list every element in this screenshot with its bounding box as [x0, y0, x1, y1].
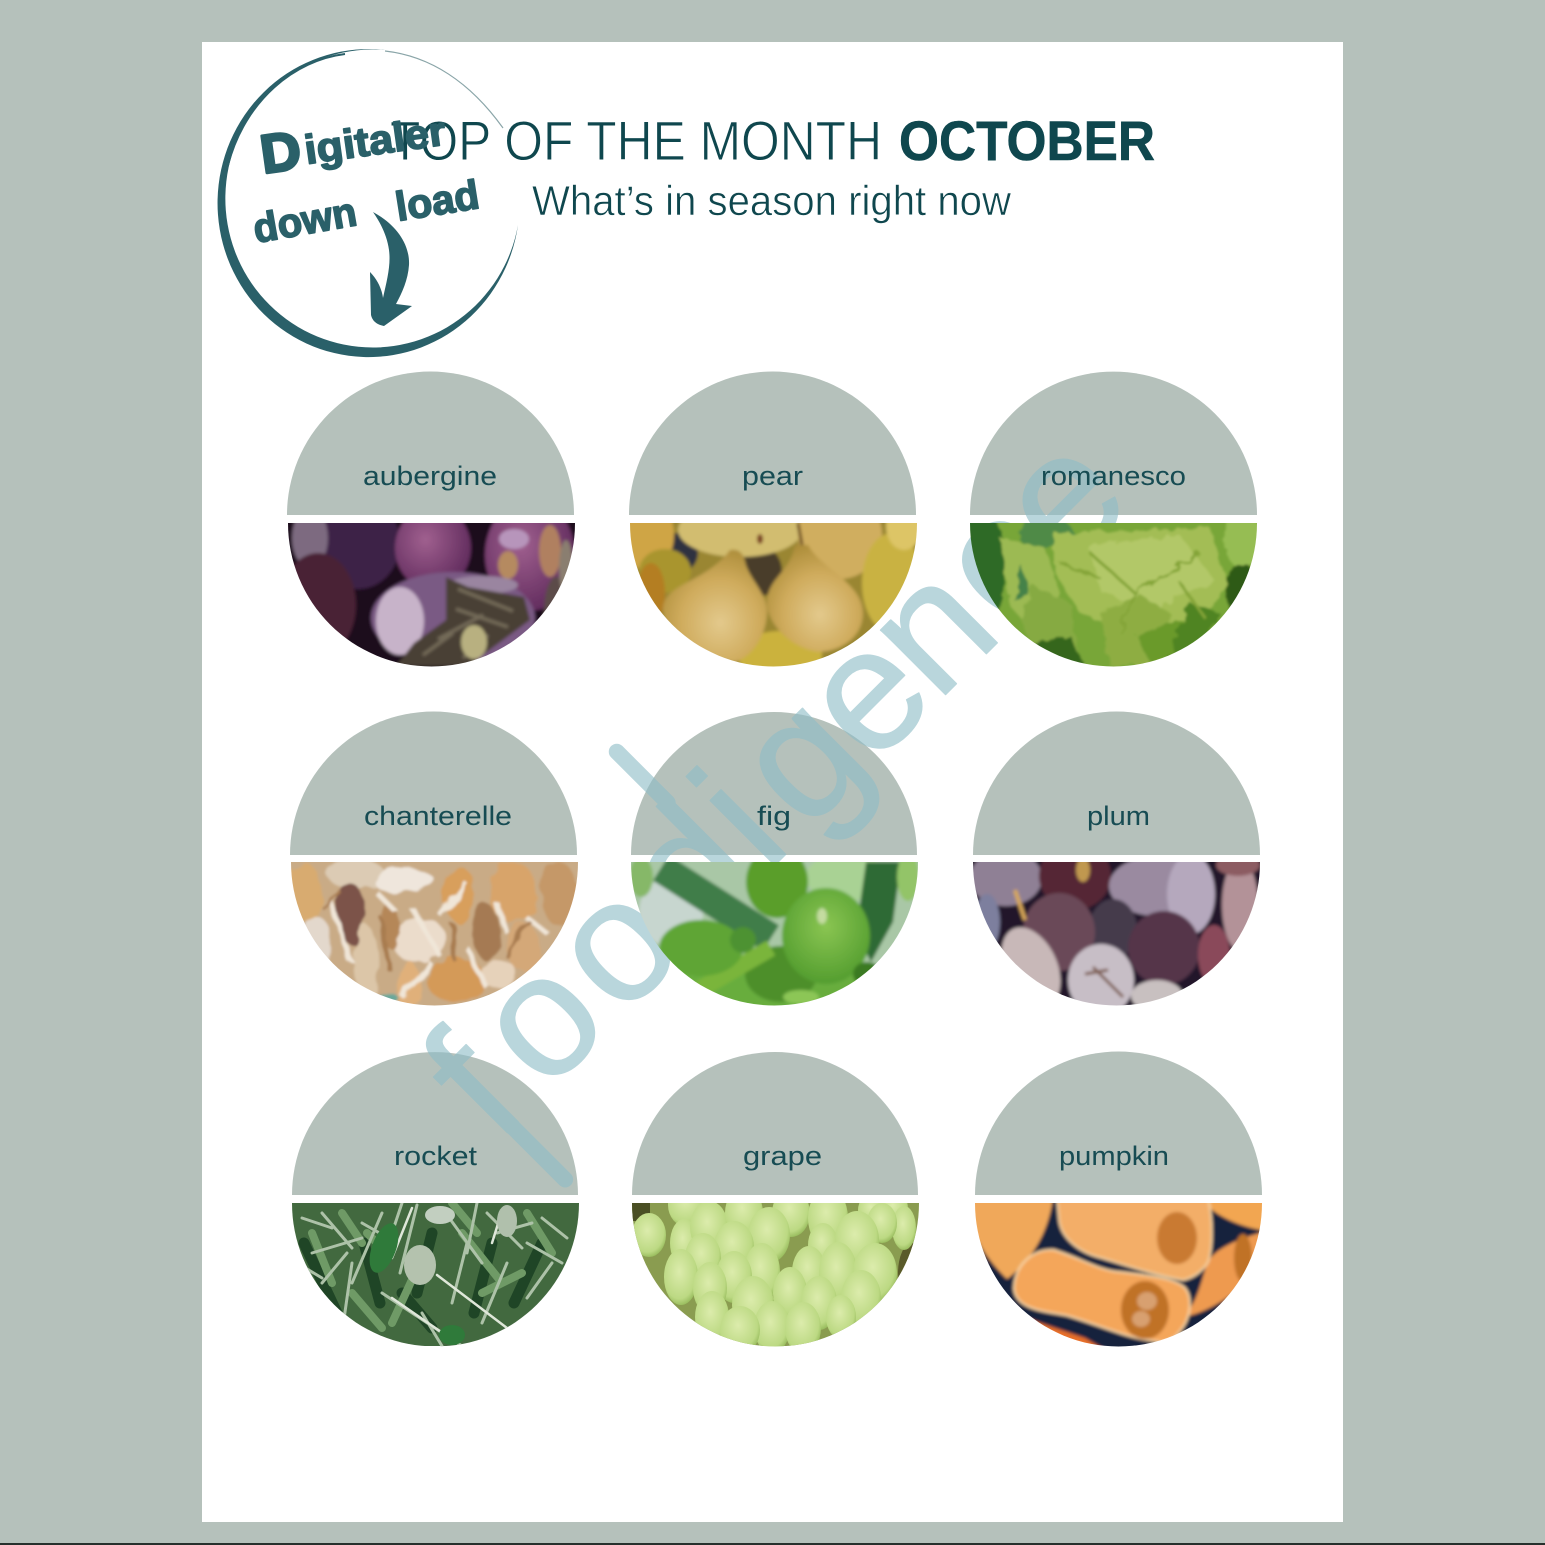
panel: chanterelle — [290, 712, 577, 855]
digital download stamp — [218, 49, 518, 357]
label: aubergine: aubergine — [363, 461, 497, 491]
panel: grape — [632, 1052, 918, 1195]
white page panel — [202, 42, 1343, 1522]
stamp text: load: load — [392, 171, 482, 230]
title: TOP OF THE MONTH — [390, 109, 882, 172]
label: pumpkin: pumpkin — [1059, 1141, 1169, 1171]
photo: grape — [632, 1203, 919, 1346]
stamp ring — [218, 49, 518, 357]
photo: pumpkin — [975, 1203, 1262, 1346]
label: plum: plum — [1087, 801, 1150, 831]
panel: plum — [973, 712, 1260, 855]
label: rocket: rocket — [394, 1141, 478, 1171]
panel: rocket — [292, 1052, 578, 1195]
photo: rocket — [292, 1203, 579, 1346]
vegetable labels — [363, 461, 1186, 1171]
photo: aubergine — [288, 523, 575, 666]
stamp text: Digitaler: D — [257, 120, 305, 185]
panel: aubergine — [287, 372, 574, 515]
stamp text: down: down — [250, 189, 360, 252]
panel: fig — [631, 712, 917, 855]
label: grape: grape — [743, 1141, 822, 1171]
label: chanterelle: chanterelle — [364, 801, 512, 831]
stamp text: Digitaler — [257, 100, 449, 185]
bottom edge line — [0, 1543, 1545, 1545]
panel: pear — [629, 372, 916, 515]
subtitle: What’s in season right now — [532, 177, 1012, 224]
stamp text: Digitaler: igitaler — [301, 108, 449, 173]
label panels — [287, 372, 1262, 1195]
photo: chanterelle — [291, 862, 578, 1006]
photo: plum — [973, 862, 1260, 1006]
label: fig: fig — [757, 801, 791, 831]
photo: pear — [630, 523, 917, 666]
icon: download arrow — [370, 212, 412, 326]
photo: fig — [631, 862, 918, 1006]
panel: pumpkin — [975, 1052, 1262, 1195]
photo: romanesco — [970, 523, 1257, 666]
title emphasis: October: OCTOBER — [899, 109, 1155, 172]
panel: romanesco — [970, 372, 1257, 515]
watermark: foodigence — [386, 393, 1162, 1170]
label: pear: pear — [742, 461, 803, 491]
label: romanesco: romanesco — [1041, 461, 1186, 491]
